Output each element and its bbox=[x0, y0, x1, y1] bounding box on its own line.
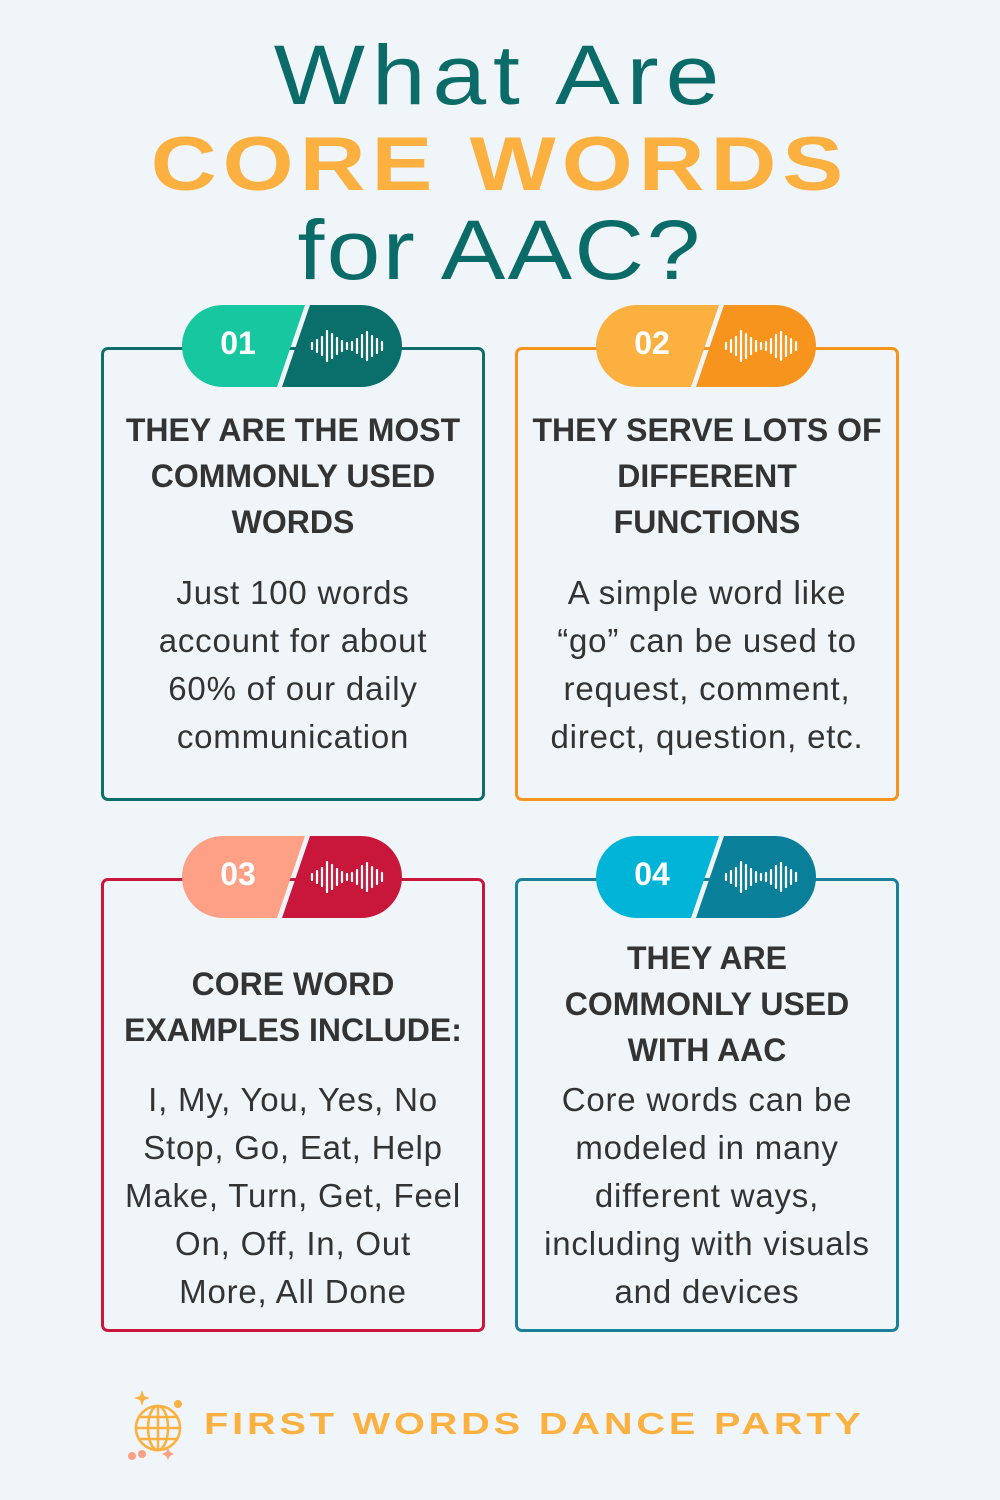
badge 01: 01 bbox=[220, 325, 256, 361]
badge 02: 02 bbox=[634, 325, 670, 361]
heading 3: EXAMPLES INCLUDE: bbox=[124, 1012, 462, 1048]
brand name: FIRST WORDS DANCE PARTY bbox=[204, 1406, 865, 1441]
body 3: I, My, You, Yes, No bbox=[148, 1081, 438, 1118]
panel 2 bbox=[515, 347, 899, 801]
badge 03: 03 bbox=[220, 856, 256, 892]
body 1: communication bbox=[177, 718, 409, 755]
body 2: direct, question, etc. bbox=[551, 718, 863, 755]
badge 04: 04 bbox=[634, 856, 670, 892]
heading 3 bbox=[124, 966, 462, 1048]
body 3: Stop, Go, Eat, Help bbox=[143, 1129, 443, 1166]
body 1: Just 100 words bbox=[176, 574, 410, 611]
heading 4 bbox=[565, 940, 849, 1068]
heading 4: WITH AAC bbox=[628, 1032, 786, 1068]
body 3: On, Off, In, Out bbox=[175, 1225, 411, 1262]
heading 2: FUNCTIONS bbox=[614, 504, 800, 540]
body 4: including with visuals bbox=[544, 1225, 870, 1262]
title line 3: for AAC? bbox=[297, 203, 702, 297]
body 4: different ways, bbox=[595, 1177, 819, 1214]
heading 1: WORDS bbox=[232, 504, 354, 540]
heading 2: THEY SERVE LOTS OF bbox=[532, 412, 882, 448]
body 3: More, All Done bbox=[179, 1273, 407, 1310]
badge 03 bbox=[182, 836, 402, 918]
body 4 bbox=[544, 1081, 870, 1310]
panel 4 bbox=[515, 878, 899, 1332]
body 2: request, comment, bbox=[564, 670, 850, 707]
panel 1 bbox=[101, 347, 485, 801]
badge 01 bbox=[182, 305, 402, 387]
body 1 bbox=[159, 574, 427, 755]
heading 3: CORE WORD bbox=[192, 966, 394, 1002]
body 3 bbox=[125, 1081, 461, 1310]
title bbox=[151, 28, 849, 297]
logo bbox=[128, 1390, 865, 1460]
body 1: 60% of our daily bbox=[168, 670, 418, 707]
icon: disco globe bbox=[128, 1390, 182, 1460]
panel 3 bbox=[101, 878, 485, 1332]
badge 04 bbox=[596, 836, 816, 918]
body 4: Core words can be bbox=[562, 1081, 852, 1118]
heading 2: DIFFERENT bbox=[617, 458, 797, 494]
body 3: Make, Turn, Get, Feel bbox=[125, 1177, 461, 1214]
body 2: “go” can be used to bbox=[557, 622, 857, 659]
badge 02 bbox=[596, 305, 816, 387]
heading 1: COMMONLY USED bbox=[151, 458, 435, 494]
body 1: account for about bbox=[159, 622, 427, 659]
body 2: A simple word like bbox=[568, 574, 846, 611]
heading 4: COMMONLY USED bbox=[565, 986, 849, 1022]
title line 2: CORE WORDS bbox=[151, 122, 849, 207]
heading 2 bbox=[532, 412, 882, 540]
body 4: modeled in many bbox=[575, 1129, 839, 1166]
body 4: and devices bbox=[615, 1273, 799, 1310]
title line 1: What Are bbox=[274, 28, 726, 122]
heading 1 bbox=[126, 412, 460, 540]
heading 1: THEY ARE THE MOST bbox=[126, 412, 460, 448]
heading 4: THEY ARE bbox=[627, 940, 787, 976]
body 2 bbox=[551, 574, 863, 755]
